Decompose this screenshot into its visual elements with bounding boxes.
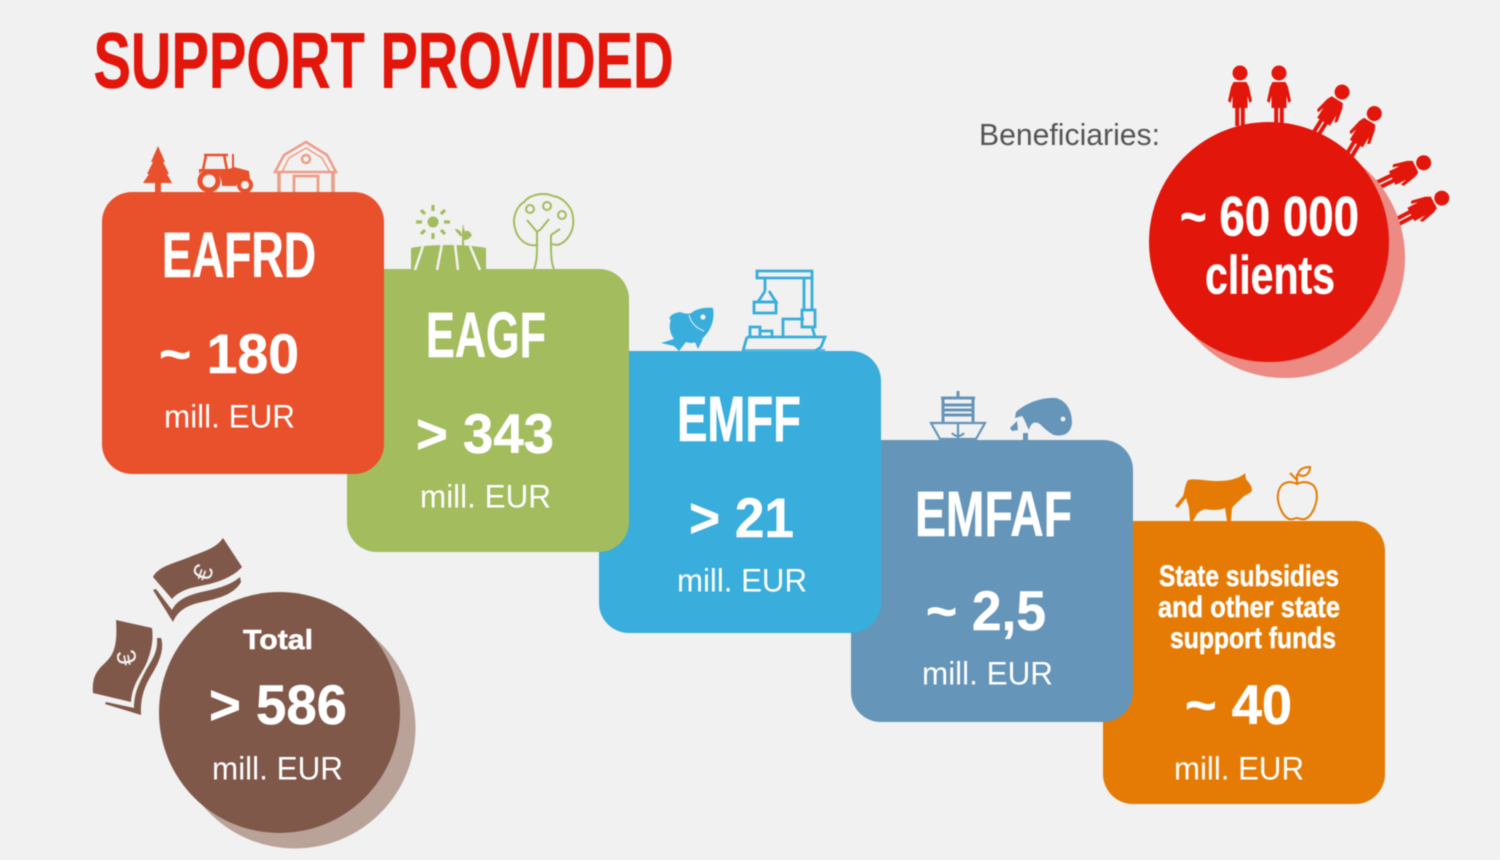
EAFRD unit: mill. EUR [164, 398, 295, 434]
state panel heading: and other state [1158, 591, 1340, 624]
EAGF panel background [347, 269, 629, 552]
total label: Total [243, 624, 313, 655]
panel: EMFAF [851, 440, 1133, 722]
clients label: clients [1205, 246, 1335, 306]
icon: apple [1278, 467, 1317, 519]
clients amount: ~ 60 000 [1180, 184, 1359, 248]
state panel heading: support funds [1170, 622, 1336, 655]
panel: EAFRD [102, 192, 384, 474]
EMFAF unit: mill. EUR [922, 656, 1053, 692]
EAGF amount: > 343 [416, 402, 554, 465]
state panel heading: State subsidies [1159, 560, 1339, 593]
circle: clients [1149, 122, 1405, 378]
state panel unit: mill. EUR [1174, 750, 1304, 786]
icon: tractor [199, 154, 251, 191]
EAFRD panel background [102, 192, 384, 474]
banknote lower: € [111, 648, 143, 668]
icon: ferry [931, 391, 985, 439]
label: beneficiaries: Beneficiaries: [979, 117, 1160, 152]
total circle [159, 592, 400, 833]
icon: people on the globe [1228, 66, 1454, 234]
EAGF unit: mill. EUR [420, 478, 551, 514]
EMFF unit: mill. EUR [677, 562, 807, 598]
icon: barn [275, 142, 336, 192]
title: SUPPORT PROVIDED [94, 16, 674, 104]
clients circle shadow [1165, 138, 1405, 378]
banknote lower [93, 620, 162, 715]
EAGF heading: EAGF [426, 299, 546, 371]
banknote upper: € [186, 561, 220, 585]
circle: total [159, 592, 416, 848]
EMFAF panel background [851, 440, 1133, 722]
EMFF amount: > 21 [689, 486, 794, 549]
clients circle [1149, 122, 1389, 362]
EAFRD amount: ~ 180 [159, 322, 299, 385]
EMFAF heading: EMFAF [915, 478, 1072, 550]
total circle shadow [174, 608, 416, 848]
banknote upper [153, 538, 242, 622]
icon: euro banknotes [93, 538, 242, 715]
panel: EAGF [347, 269, 629, 552]
total amount: > 586 [209, 673, 347, 736]
EMFF heading: EMFF [677, 383, 801, 455]
EMFF panel background [599, 351, 881, 633]
panel: EMFF [599, 351, 881, 633]
icon: pine tree [143, 146, 172, 192]
state panel amount: ~ 40 [1185, 673, 1292, 736]
icon: fish [1010, 398, 1072, 440]
icon: cow [1175, 473, 1252, 521]
icon: sun over field with sprout [411, 205, 486, 270]
EMFAF amount: ~ 2,5 [926, 579, 1046, 642]
state panel background [1103, 521, 1385, 804]
icon: cargo ship with crane [743, 271, 825, 351]
total unit: mill. EUR [212, 750, 343, 786]
panel: state subsidies [1103, 521, 1385, 804]
icon: jumping fish [661, 308, 714, 351]
icon: fruit tree [514, 194, 573, 269]
state panel heading [1158, 560, 1340, 655]
EAFRD heading: EAFRD [162, 219, 316, 291]
